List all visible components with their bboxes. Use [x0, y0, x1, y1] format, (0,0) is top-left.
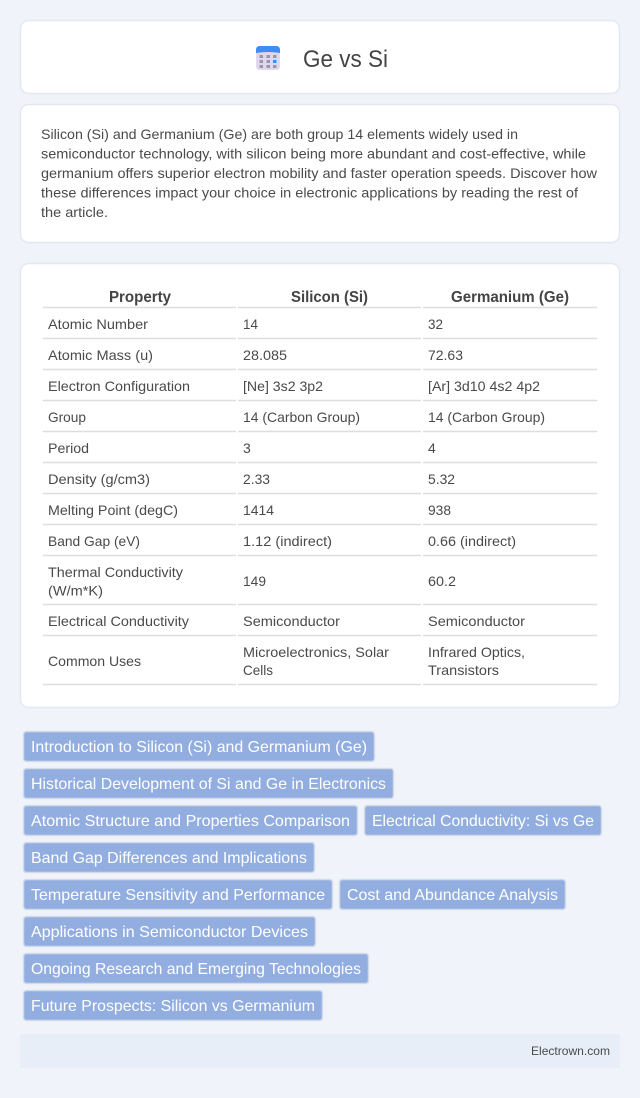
table row: electron configuration: Electron Configuration	[48, 378, 190, 394]
tag: introduction: Introduction to Silicon (Si) and Germanium (Ge)	[31, 739, 367, 756]
table row: common uses	[48, 644, 525, 678]
table row: melting point: Melting Point (degC)	[48, 502, 178, 518]
tag: atomic structure	[24, 806, 358, 836]
table row: group	[48, 409, 545, 425]
tag: cost and abundance: Cost and Abundance Analysis	[347, 887, 558, 904]
tag: future prospects	[24, 990, 322, 1020]
table row: electrical conductivity: Electrical Conductivity	[48, 613, 189, 629]
panel: introduction	[20, 104, 620, 242]
table row: group: 14 (Carbon Group)	[243, 409, 360, 425]
table row: thermal conductivity: 60.2	[428, 573, 456, 589]
table row: density: Density (g/cm3)	[48, 471, 150, 487]
tag: band gap: Band Gap Differences and Implications	[31, 850, 307, 867]
table row: common uses: Transistors	[428, 662, 499, 678]
table row: band gap: 0.66 (indirect)	[428, 533, 516, 549]
tag: temperature sensitivity: Temperature Sensitivity and Performance	[31, 887, 325, 904]
table row: electrical conductivity: Semiconductor	[428, 613, 525, 629]
table row: common uses: Cells	[243, 662, 273, 678]
text block: introduction: germanium offers superior electron mobility and faster operation speeds. Discover how	[41, 165, 598, 181]
table row: period: Period	[48, 440, 89, 456]
table row: group: Group	[48, 409, 86, 425]
tag: ongoing research: Ongoing Research and Emerging Technologies	[31, 961, 361, 978]
tag: applications	[24, 916, 316, 946]
table row: density: 2.33	[243, 471, 270, 487]
table row: band gap: 1.12 (indirect)	[243, 533, 332, 549]
table row: melting point: 1414	[243, 502, 274, 518]
table row: electron configuration: [Ar] 3d10 4s2 4p2	[428, 378, 540, 394]
table header: Silicon (Si)	[291, 289, 368, 306]
table row: atomic number: Atomic Number	[48, 316, 148, 332]
tag: band gap	[24, 842, 314, 872]
table row: atomic mass: 28.085	[243, 347, 287, 363]
tag: historical development: Historical Development of Si and Ge in Electronics	[31, 776, 386, 793]
tag: electrical conductivity	[364, 806, 602, 836]
table header: Property	[109, 289, 171, 306]
tag: cost and abundance	[340, 880, 566, 910]
tag: electrical conductivity: Electrical Conductivity: Si vs Ge	[372, 813, 594, 830]
table row: thermal conductivity: 149	[243, 573, 266, 589]
table row: common uses: Common Uses	[48, 653, 141, 669]
table row: thermal conductivity: Thermal Conductivity	[48, 564, 183, 580]
tag: introduction	[24, 732, 374, 762]
table rules	[43, 308, 597, 684]
tag: future prospects: Future Prospects: Silicon vs Germanium	[31, 998, 315, 1015]
table row: thermal conductivity: (W/m*K)	[48, 582, 103, 598]
topic links	[24, 732, 602, 1020]
table row: band gap: Band Gap (eV)	[48, 533, 140, 549]
table row: period: 4	[428, 440, 436, 456]
table row: atomic number: 32	[428, 316, 443, 332]
tag: temperature sensitivity	[24, 880, 332, 910]
table row: thermal conductivity	[48, 564, 456, 598]
icon: calendar	[256, 46, 280, 70]
table row: common uses: Microelectronics, Solar	[243, 644, 389, 660]
table row: electron configuration	[48, 378, 540, 394]
text block: introduction: semiconductor technology, with silicon being more abundant and cost-effective, while	[41, 146, 586, 162]
tag: historical development	[24, 768, 394, 798]
table row: common uses: Infrared Optics,	[428, 644, 525, 660]
table row: atomic mass	[48, 347, 463, 363]
table row: electron configuration: [Ne] 3s2 3p2	[243, 378, 323, 394]
table row: atomic number	[48, 316, 443, 332]
table row: melting point: 938	[428, 502, 451, 518]
text block: introduction: Silicon (Si) and Germanium (Ge) are both group 14 elements widely used in	[41, 126, 518, 142]
table row: density: 5.32	[428, 471, 455, 487]
panel: comparison table	[20, 264, 620, 708]
table row: atomic number: 14	[243, 316, 258, 332]
text block: introduction: the article.	[41, 204, 108, 220]
table row: group: 14 (Carbon Group)	[428, 409, 545, 425]
table header	[109, 289, 569, 306]
tag: applications: Applications in Semiconductor Devices	[31, 924, 308, 941]
table row: electrical conductivity	[48, 613, 525, 629]
text block: introduction: these differences impact your choice in electronic applications by reading the rest of	[41, 184, 578, 200]
table row: electrical conductivity: Semiconductor	[243, 613, 340, 629]
table header: Germanium (Ge)	[451, 289, 569, 306]
table row: period	[48, 440, 436, 456]
table row: density	[48, 471, 455, 487]
table row: melting point	[48, 502, 451, 518]
footer	[20, 1034, 620, 1068]
footer: Electrown.com	[531, 1044, 610, 1058]
tag: ongoing research	[24, 954, 368, 984]
text block: introduction	[41, 126, 598, 220]
panel: header	[20, 20, 620, 94]
title: Ge vs Si	[303, 46, 388, 73]
table row: period: 3	[243, 440, 251, 456]
table row: atomic mass: Atomic Mass (u)	[48, 347, 153, 363]
table row: band gap	[48, 533, 516, 549]
tag: atomic structure: Atomic Structure and Properties Comparison	[31, 813, 350, 830]
table row: atomic mass: 72.63	[428, 347, 463, 363]
